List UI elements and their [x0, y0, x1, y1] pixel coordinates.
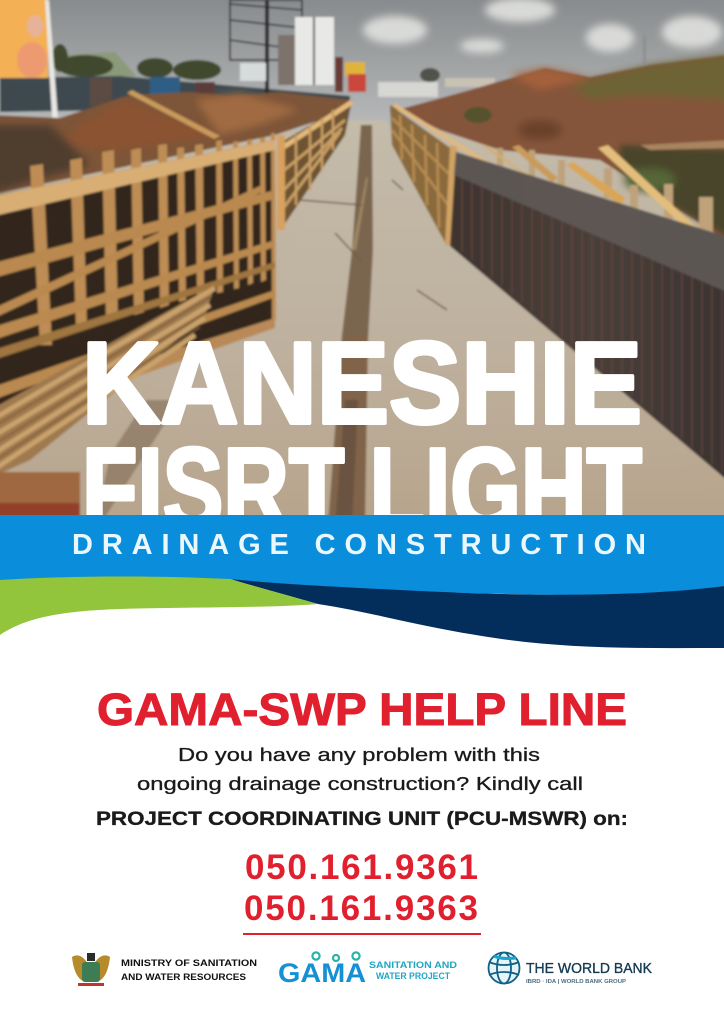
logo: GAMA Sanitation and Water Project	[278, 952, 457, 988]
icon: GAMA figures	[312, 952, 360, 961]
logo: The World Bank: IBRD · IDA | WORLD BANK GROUP	[526, 979, 627, 985]
photo base tone	[0, 100, 724, 525]
phone numbers	[244, 848, 478, 928]
near left formwork section	[0, 133, 276, 428]
icon: globe	[488, 952, 520, 984]
logo: The World Bank	[488, 952, 652, 985]
subtitle: drainage construction: DRAINAGE CONSTRUCTION	[72, 529, 646, 561]
help line instructions	[96, 744, 628, 830]
right earth mounds	[390, 35, 724, 245]
centre channel	[95, 125, 447, 525]
photo: drainage construction site	[0, 0, 724, 525]
far right formwork section	[390, 105, 490, 246]
help line heading: GAMA-SWP HELP LINE	[97, 684, 627, 735]
phone numbers: 050.161.9363	[244, 889, 478, 928]
sign board on post	[0, 0, 59, 132]
background trees and fence	[0, 44, 350, 112]
logo: Ministry of Sanitation and Water Resources: AND WATER RESOURCES	[121, 972, 247, 983]
title: KANESHIE FISRT LIGHT: KANESHIE	[82, 318, 642, 448]
logo: Ministry of Sanitation and Water Resources: MINISTRY OF SANITATION	[121, 958, 257, 969]
right fence posts and braces	[480, 145, 713, 235]
red divider under phone numbers	[243, 933, 481, 935]
wave: green	[0, 576, 318, 635]
help line instructions: Do you have any problem with this	[178, 744, 540, 765]
billboards	[230, 0, 495, 97]
blue banner with wave shapes	[0, 515, 724, 648]
title: KANESHIE FISRT LIGHT	[86, 340, 643, 515]
wave: navy	[230, 579, 724, 648]
help line instructions: ongoing drainage construction? Kindly call	[137, 773, 583, 794]
concrete floor	[346, 120, 392, 130]
far left formwork section	[277, 100, 352, 230]
logo: The World Bank: THE WORLD BANK	[526, 961, 652, 977]
logo: Ministry of Sanitation and Water Resources	[72, 953, 257, 986]
phone numbers: 050.161.9361	[245, 848, 478, 887]
right retaining wall with rebar	[450, 152, 724, 486]
stacked lumber on the left	[0, 285, 215, 525]
logo: GAMA Sanitation and Water Project: GAMA	[278, 958, 366, 988]
logo: GAMA Sanitation and Water Project: WATER PROJECT	[376, 970, 450, 981]
help line instructions: PROJECT COORDINATING UNIT (PCU-MSWR) on:	[96, 809, 628, 830]
left earth mounds	[0, 90, 350, 195]
icon: coat of arms	[72, 953, 110, 986]
sky with clouds	[0, 0, 724, 130]
logo: GAMA Sanitation and Water Project: SANITATION AND	[369, 959, 457, 970]
